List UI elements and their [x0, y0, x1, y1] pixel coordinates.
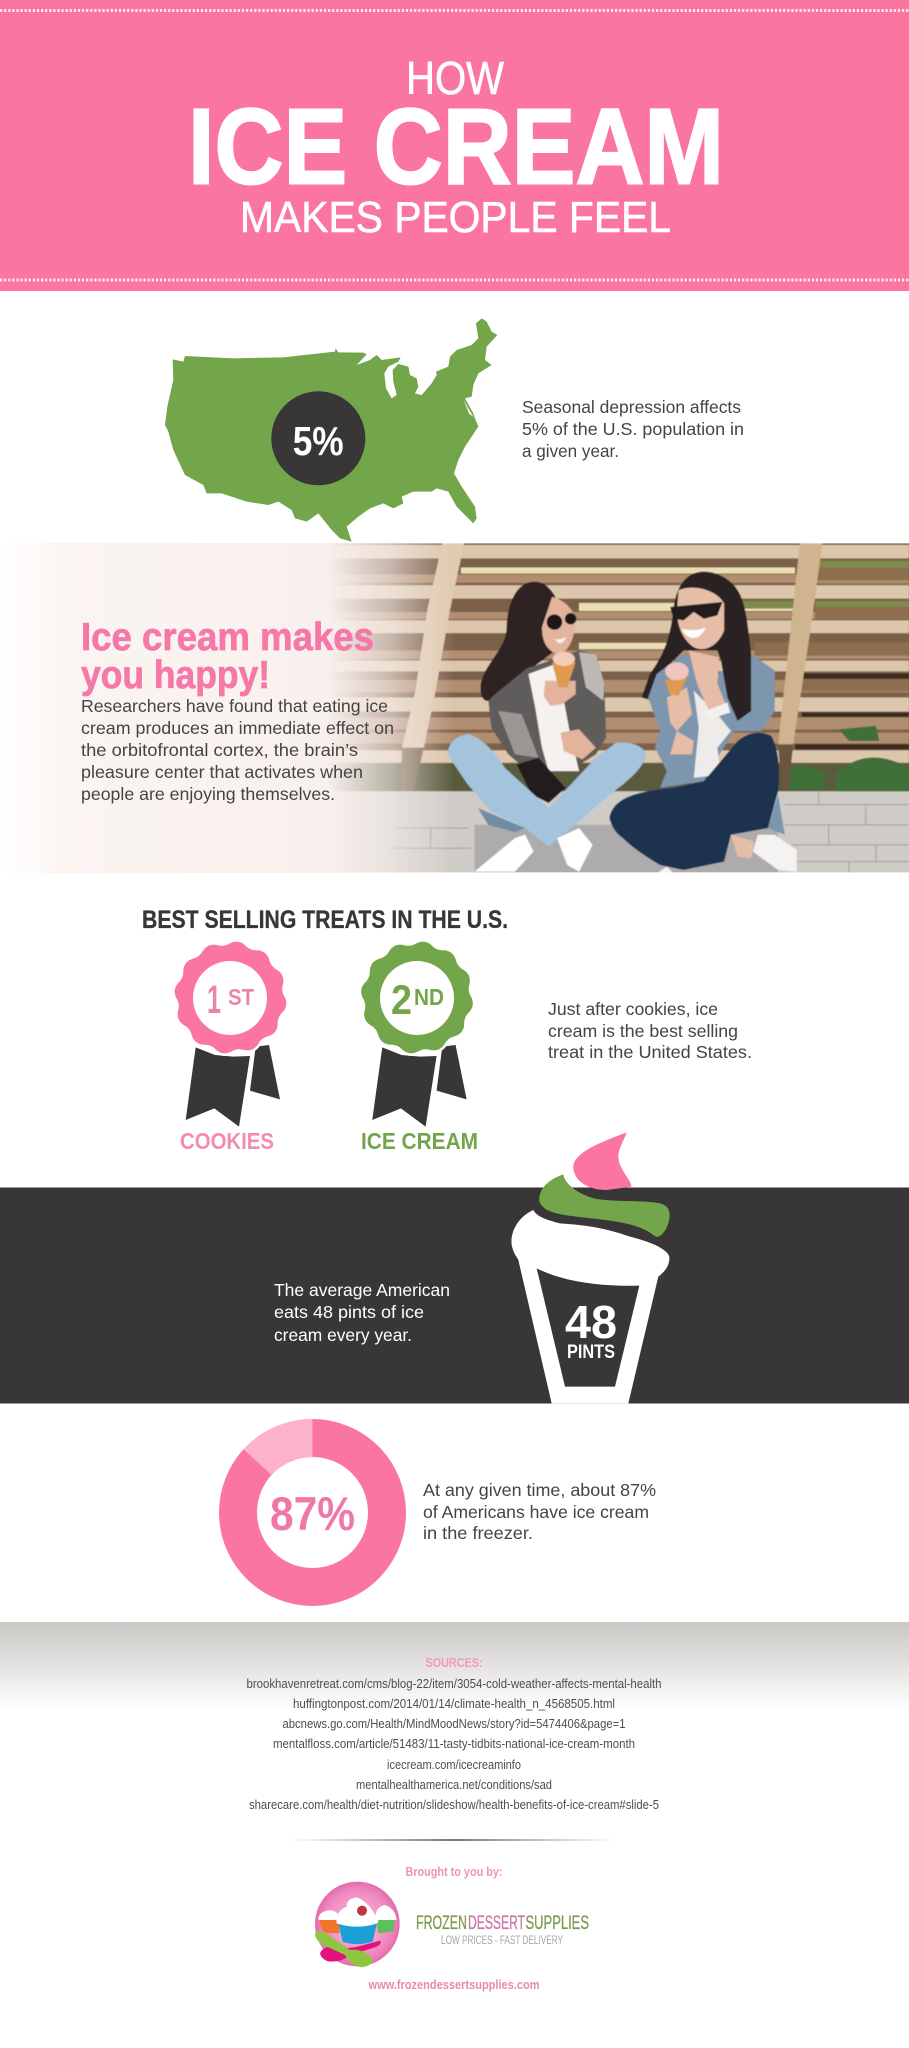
badge: first place cookies	[175, 942, 286, 1154]
text: seasonal depression: 5% of the U.S. population in	[522, 419, 744, 439]
text: ice cream in the freezer: At any given time, about 87%	[423, 1480, 656, 1500]
text: just after cookies: treat in the United States.	[548, 1042, 752, 1062]
text: ice cream in the freezer: of Americans have ice cream	[423, 1502, 649, 1522]
text: seasonal depression: a given year.	[522, 441, 619, 461]
pavement	[313, 791, 909, 873]
badge: second place ice cream: ND	[414, 984, 444, 1010]
leaves	[790, 726, 909, 791]
heading: ice cream makes you happy: Ice cream makes	[81, 616, 374, 659]
text: just after cookies: cream is the best selling	[548, 1021, 738, 1041]
sources list: icecream.com/icecreaminfo	[387, 1758, 521, 1772]
title: MAKES PEOPLE FEEL	[240, 193, 671, 242]
sources list: huffingtonpost.com/2014/01/14/climate-health_n_4568505.html	[293, 1697, 615, 1711]
title	[188, 52, 724, 242]
sources list: sharecare.com/health/diet-nutrition/slideshow/health-benefits-of-ice-cream#slide-5	[249, 1798, 659, 1812]
text: orbitofrontal cortex: Researchers have found that eating ice	[81, 696, 388, 716]
logo tagline: LOW PRICES - FAST DELIVERY	[441, 1935, 563, 1947]
panel: best selling treats	[142, 906, 752, 1154]
left woman	[481, 582, 555, 701]
5% circle: 5%	[293, 418, 344, 464]
text: orbitofrontal cortex: people are enjoying themselves.	[81, 784, 335, 804]
sources list: mentalhealthamerica.net/conditions/sad	[356, 1778, 552, 1792]
text: average american: eats 48 pints of ice	[274, 1302, 424, 1322]
text: orbitofrontal cortex	[81, 696, 394, 804]
panel: seasonal depression	[165, 318, 744, 542]
donut chart: 87%	[270, 1487, 355, 1540]
text: seasonal depression	[522, 397, 744, 461]
header banner	[0, 0, 909, 291]
text: average american: cream every year.	[274, 1325, 412, 1345]
posts	[402, 543, 464, 748]
48 pints label: PINTS	[567, 1342, 615, 1363]
logo wordmark: FROZEN	[416, 1912, 467, 1934]
panel: 87 percent	[238, 1419, 656, 1587]
badge: second place ice cream	[361, 942, 478, 1154]
text: orbitofrontal cortex: pleasure center that activates when	[81, 762, 363, 782]
text: seasonal depression: Seasonal depression affects	[522, 397, 741, 417]
sources heading: SOURCES:	[426, 1655, 482, 1670]
brought to you by: Brought to you by:	[406, 1864, 502, 1879]
text: orbitofrontal cortex: cream produces an immediate effect on	[81, 718, 394, 738]
badge: second place ice cream: 2	[391, 976, 412, 1023]
text: ice cream in the freezer	[423, 1480, 656, 1543]
panel: 48 pints	[0, 1132, 909, 1404]
text: just after cookies	[548, 999, 752, 1062]
title: HOW	[406, 52, 505, 104]
48 pints label: 48	[565, 1296, 617, 1348]
panel: ice cream makes you happy	[0, 543, 909, 873]
planks mid	[313, 575, 909, 743]
photo fade	[0, 543, 909, 873]
text: average american: The average American	[274, 1280, 450, 1300]
text: orbitofrontal cortex: the orbitofrontal cortex, the brain’s	[81, 740, 358, 760]
logo: frozen dessert supplies	[315, 1882, 589, 1967]
sources list: abcnews.go.com/Health/MindMoodNews/story?id=5474406&page=1	[282, 1717, 626, 1731]
icon: dessert cups and spoon	[315, 1882, 400, 1967]
badge: first place cookies: ST	[228, 984, 254, 1010]
map of the United States	[165, 318, 497, 542]
donut chart	[238, 1419, 387, 1587]
badge: first place cookies: COOKIES	[180, 1128, 274, 1154]
heading: best selling treats: BEST SELLING TREATS IN THE U.S.	[142, 906, 508, 934]
panel: sources footer	[0, 1622, 909, 1992]
website url: www.frozendessertsupplies.com	[368, 1977, 540, 1992]
right woman	[641, 572, 751, 711]
photo: two women eating ice cream	[313, 543, 909, 873]
text: ice cream in the freezer: in the freezer.	[423, 1523, 533, 1543]
heading: ice cream makes you happy: you happy!	[81, 654, 270, 697]
logo wordmark	[416, 1912, 589, 1934]
title: ICE CREAM	[188, 86, 724, 206]
sources list	[246, 1677, 662, 1812]
icon: ice cream cup	[511, 1132, 670, 1403]
bright gaps and foliage	[461, 567, 795, 649]
planks light	[313, 545, 909, 763]
badge: first place cookies: 1	[207, 978, 221, 1022]
heading: ice cream makes you happy	[81, 616, 374, 697]
text: average american	[274, 1280, 450, 1345]
sources list: brookhavenretreat.com/cms/blog-22/item/3054-cold-weather-affects-mental-health	[246, 1677, 662, 1691]
5% circle	[271, 391, 365, 485]
sources list: mentalfloss.com/article/51483/11-tasty-tidbits-national-ice-cream-month	[273, 1737, 635, 1751]
logo wordmark: DESSERT	[468, 1912, 525, 1934]
text: just after cookies: Just after cookies, ice	[548, 999, 718, 1019]
badge: second place ice cream: ICE CREAM	[361, 1128, 478, 1154]
logo wordmark: SUPPLIES	[526, 1912, 589, 1934]
